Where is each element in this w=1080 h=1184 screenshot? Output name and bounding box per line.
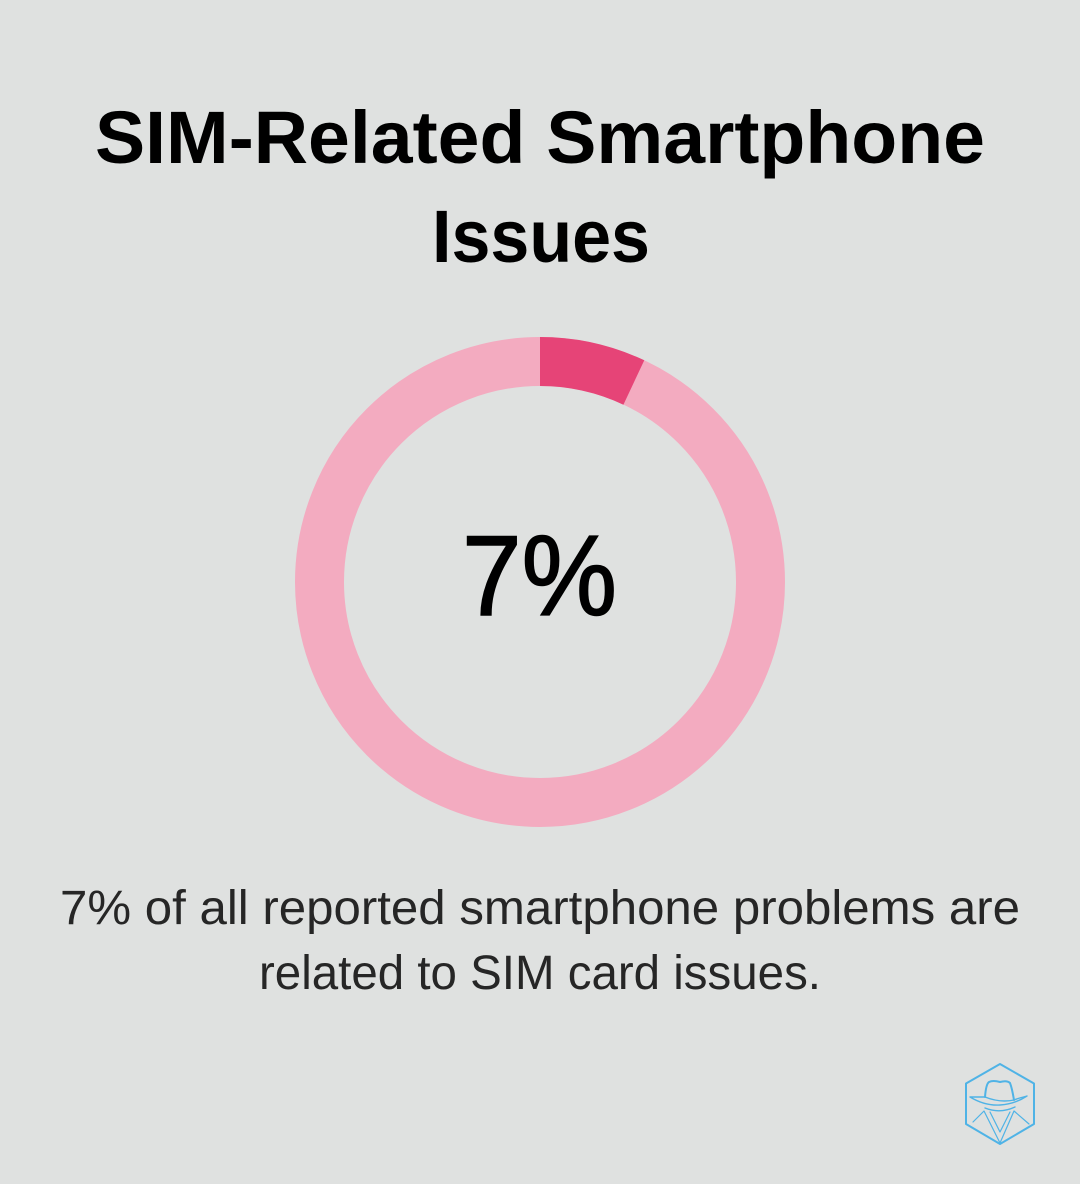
donut highlighted segment: 7%	[540, 337, 644, 405]
description text	[60, 882, 1020, 1000]
donut track	[320, 362, 760, 802]
description text: 7% of all reported smartphone problems are	[60, 882, 1020, 935]
title	[95, 96, 985, 278]
icon: hexagon spy logo	[966, 1064, 1034, 1144]
title: SIM-Related Smartphone	[95, 96, 985, 179]
description text: related to SIM card issues.	[259, 947, 821, 1000]
donut chart	[320, 337, 760, 802]
title: Issues	[432, 195, 650, 278]
center value: 7%	[462, 513, 617, 640]
